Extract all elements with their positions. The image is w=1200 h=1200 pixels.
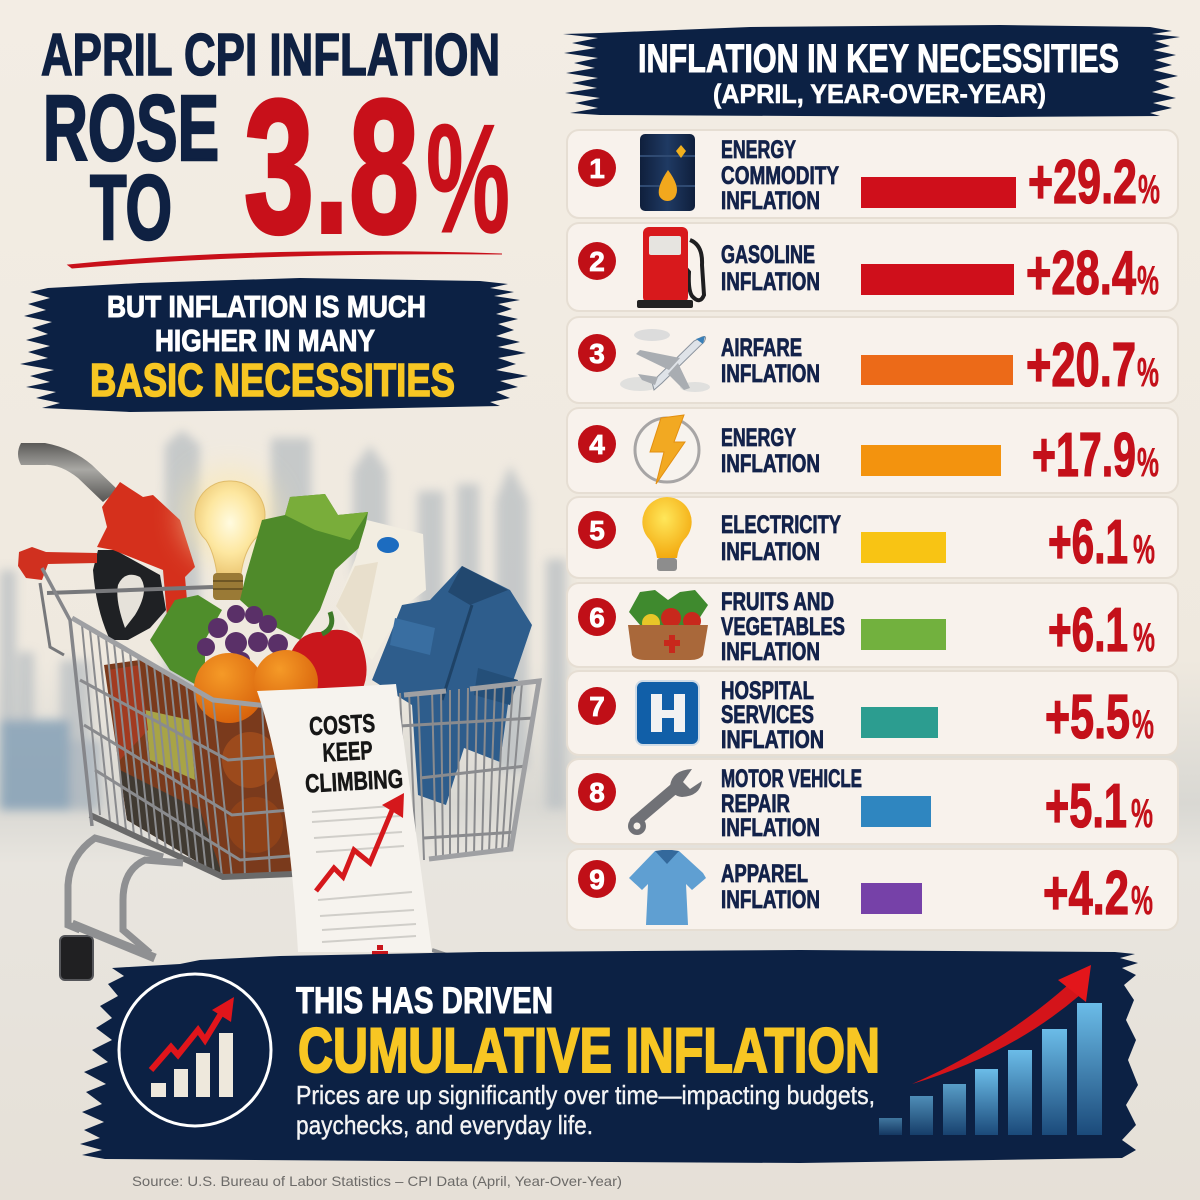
banner: basic necessities: BUT INFLATION IS MUCH bbox=[107, 289, 426, 324]
panel: row 3 airfare: INFLATION bbox=[721, 360, 820, 388]
left greens bbox=[150, 595, 222, 690]
panel: row 5 electricity: 5 bbox=[589, 515, 605, 546]
panel: row 1 energy commodity: +29.2 bbox=[1028, 148, 1137, 217]
icon: produce basket bbox=[628, 590, 708, 660]
panel: row 8 motor vehicle repair: MOTOR VEHICLE bbox=[721, 765, 862, 793]
panel: row 1 energy commodity: COMMODITY bbox=[721, 162, 839, 190]
icon: oil barrel bbox=[640, 134, 695, 211]
basket contents bbox=[104, 660, 293, 877]
banner: basic necessities: BASIC NECESSITIES bbox=[90, 354, 455, 406]
panel: row 3 airfare: AIRFARE bbox=[721, 334, 802, 362]
title: ROSE bbox=[43, 76, 219, 180]
panel: row 9 apparel: % bbox=[1131, 877, 1153, 923]
icon: hospital sign bbox=[636, 681, 699, 745]
panel: row 2 gasoline bbox=[567, 223, 1178, 311]
banner: cumulative inflation: CUMULATIVE INFLATION bbox=[298, 1016, 880, 1086]
panel: row 7 hospital services: SERVICES bbox=[721, 701, 814, 729]
panel: row 5 electricity: INFLATION bbox=[721, 538, 820, 566]
light bulb bbox=[182, 468, 278, 600]
panel: row 1 energy commodity: 1 bbox=[589, 153, 605, 184]
panel: row 8 motor vehicle repair bbox=[567, 759, 1178, 844]
panel: row 6 fruits and vegetables: INFLATION bbox=[721, 638, 820, 666]
icon: light bulb bbox=[642, 497, 692, 571]
bar chart bbox=[879, 1003, 1102, 1135]
panel: row 5 electricity bbox=[567, 497, 1178, 578]
panel: row 4 energy: 4 bbox=[589, 429, 605, 460]
shopping cart illustration bbox=[18, 443, 539, 980]
banner: cumulative inflation: paychecks, and everyday life. bbox=[296, 1110, 593, 1140]
panel: row 6 fruits and vegetables: 6 bbox=[589, 602, 605, 633]
panel: row 8 motor vehicle repair: +5.1 bbox=[1045, 772, 1127, 841]
panel: row 7 hospital services bbox=[567, 671, 1178, 755]
panel: row 5 electricity: ELECTRICITY bbox=[721, 511, 841, 539]
title: APRIL CPI INFLATION bbox=[41, 22, 500, 88]
panel: row 4 energy bbox=[567, 408, 1178, 493]
panel: row 3 airfare: 3 bbox=[589, 338, 605, 369]
rear rail bbox=[47, 587, 213, 593]
icon: wrench bbox=[628, 769, 702, 835]
panel: row 3 airfare bbox=[567, 317, 1178, 403]
panel: row 7 hospital services: +5.5 bbox=[1045, 683, 1130, 752]
cart frame and wheel bbox=[60, 838, 468, 980]
panel: row 1 energy commodity: ENERGY bbox=[721, 136, 796, 164]
icon: circle chart bbox=[119, 974, 271, 1126]
panel: row 2 gasoline: +28.4 bbox=[1026, 239, 1136, 308]
receipt: CLIMBING bbox=[304, 763, 404, 799]
panel: row 2 gasoline: 2 bbox=[589, 246, 605, 277]
title bbox=[41, 22, 510, 273]
banner: basic necessities bbox=[20, 278, 528, 412]
panel: row 4 energy: % bbox=[1137, 439, 1159, 485]
panel: row 6 fruits and vegetables bbox=[567, 583, 1178, 667]
panel: row 7 hospital services: INFLATION bbox=[721, 726, 824, 754]
panel: row 1 energy commodity: % bbox=[1138, 166, 1160, 212]
panel: row 9 apparel: APPAREL bbox=[721, 860, 808, 888]
panel: row 9 apparel: 9 bbox=[589, 864, 605, 895]
panel: row 4 energy: INFLATION bbox=[721, 450, 820, 478]
banner: cumulative inflation: Prices are up significantly over time—impacting budgets, bbox=[296, 1080, 875, 1110]
panel: row 6 fruits and vegetables: +6.1 bbox=[1048, 596, 1128, 665]
gas nozzle bbox=[18, 443, 195, 640]
panel: row 5 electricity: +6.1 bbox=[1048, 508, 1128, 577]
panel: row 9 apparel: +4.2 bbox=[1043, 859, 1129, 928]
denim shirt bbox=[372, 566, 532, 805]
icon: airplane bbox=[620, 329, 710, 392]
red underline swoosh bbox=[68, 252, 502, 268]
panel: row 5 electricity: % bbox=[1133, 526, 1155, 572]
banner: basic necessities: HIGHER IN MANY bbox=[155, 323, 375, 358]
icon: lightning bolt bbox=[635, 415, 699, 484]
wire basket bbox=[40, 568, 539, 878]
panel: row 6 fruits and vegetables: FRUITS AND bbox=[721, 588, 834, 616]
panel: row 9 apparel bbox=[567, 849, 1178, 930]
panel: row 8 motor vehicle repair: 8 bbox=[589, 777, 605, 808]
lettuce bbox=[240, 494, 368, 640]
icon: blue shirt bbox=[629, 850, 706, 925]
icon: gas pump bbox=[637, 227, 704, 308]
panel: row 7 hospital services: HOSPITAL bbox=[721, 677, 814, 705]
panel: row 6 fruits and vegetables: VEGETABLES bbox=[721, 613, 845, 641]
panel: row 8 motor vehicle repair: REPAIR bbox=[721, 790, 790, 818]
panel: row 7 hospital services: % bbox=[1132, 701, 1154, 747]
panel: row 8 motor vehicle repair: INFLATION bbox=[721, 814, 820, 842]
panel: row 1 energy commodity bbox=[567, 130, 1178, 218]
panel: row 2 gasoline: INFLATION bbox=[721, 268, 820, 296]
panel: row 8 motor vehicle repair: % bbox=[1131, 790, 1153, 836]
header banner: inflation in key necessities bbox=[563, 25, 1180, 117]
panel: row 3 airfare: +20.7 bbox=[1026, 331, 1136, 400]
title: 3.8 bbox=[244, 61, 419, 273]
title: % bbox=[426, 92, 510, 265]
header banner: inflation in key necessities: (APRIL, YEAR-OVER-YEAR) bbox=[713, 79, 1046, 109]
receipt: KEEP bbox=[322, 735, 373, 768]
title: TO bbox=[90, 157, 172, 259]
panel: row 4 energy: ENERGY bbox=[721, 424, 796, 452]
cart handle bbox=[18, 547, 97, 580]
receipt: COSTS bbox=[308, 708, 376, 741]
grapes bbox=[197, 605, 288, 668]
panel: row 9 apparel: INFLATION bbox=[721, 886, 820, 914]
receipt bbox=[257, 684, 432, 957]
banner: cumulative inflation: THIS HAS DRIVEN bbox=[296, 980, 553, 1021]
banner: cumulative inflation bbox=[80, 950, 1138, 1163]
panel: row 4 energy: +17.9 bbox=[1032, 421, 1136, 490]
red pepper bbox=[290, 612, 367, 690]
source note: Source: U.S. Bureau of Labor Statistics – CPI Data (April, Year-Over-Year) bbox=[132, 1173, 622, 1189]
panel: row 6 fruits and vegetables: % bbox=[1133, 614, 1155, 660]
milk carton bbox=[336, 520, 426, 660]
panel: row 2 gasoline: GASOLINE bbox=[721, 241, 815, 269]
panel: row 2 gasoline: % bbox=[1137, 257, 1159, 303]
blurred city skyline bbox=[0, 430, 566, 810]
arrow: rising trend bbox=[912, 965, 1091, 1084]
panel: row 3 airfare: % bbox=[1137, 349, 1159, 395]
panel: row 7 hospital services: 7 bbox=[589, 691, 605, 722]
oranges bbox=[194, 653, 264, 723]
panel: row 1 energy commodity: INFLATION bbox=[721, 187, 820, 215]
